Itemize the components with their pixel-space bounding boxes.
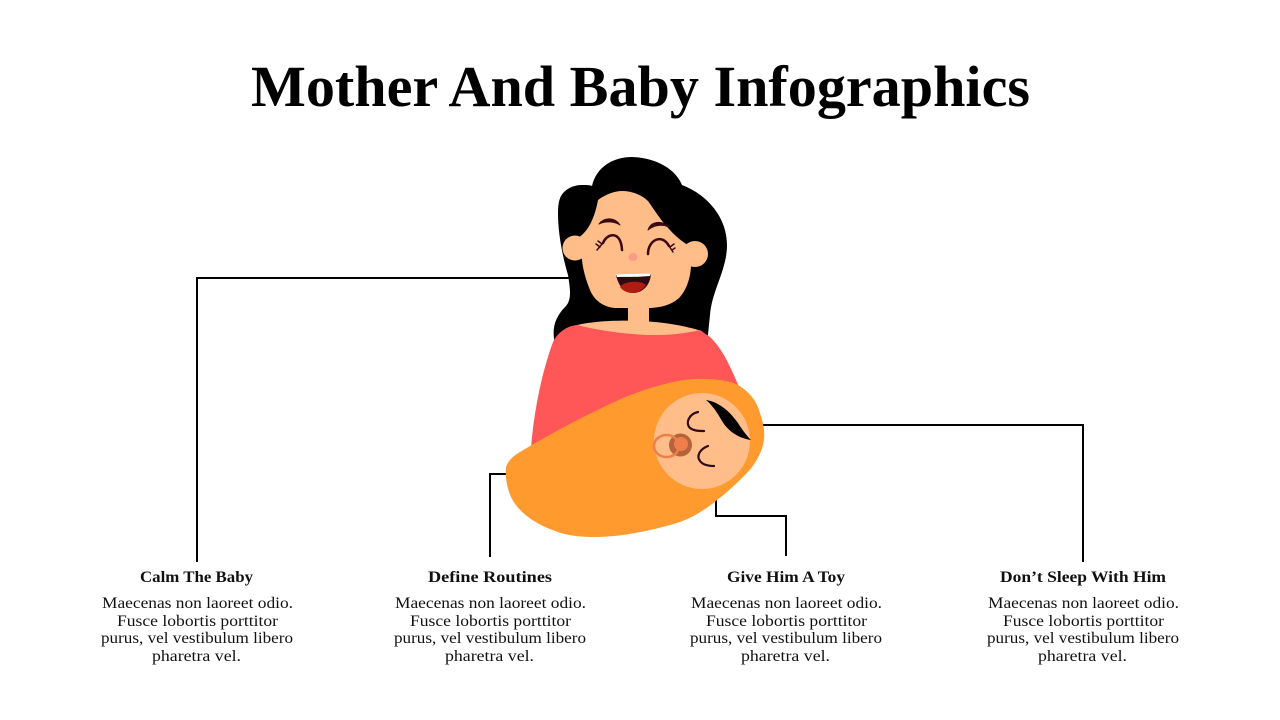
illustration: mother and baby	[506, 157, 764, 537]
mother hair	[554, 157, 727, 344]
body: purus, vel vestibulum libero	[101, 630, 293, 647]
body: purus, vel vestibulum libero	[987, 630, 1179, 647]
mother face	[578, 191, 695, 308]
mother ears	[562, 236, 708, 267]
body: Fusce lobortis porttitor	[410, 613, 572, 630]
mother nose	[628, 253, 638, 261]
heading: Don’t Sleep With Him	[1000, 569, 1167, 586]
body	[394, 595, 586, 665]
body	[690, 595, 882, 665]
mother chest	[574, 321, 702, 338]
body: Maecenas non laoreet odio.	[102, 595, 293, 612]
text block: calm the baby	[101, 569, 293, 665]
body	[987, 595, 1179, 665]
text block: give him a toy	[690, 569, 882, 665]
body: pharetra vel.	[741, 648, 830, 665]
connector: don't sleep with him	[760, 425, 1083, 562]
body: Maecenas non laoreet odio.	[988, 595, 1179, 612]
body: Maecenas non laoreet odio.	[691, 595, 882, 612]
body: pharetra vel.	[1038, 648, 1127, 665]
body	[101, 595, 293, 665]
mother mouth	[616, 274, 651, 293]
body: purus, vel vestibulum libero	[690, 630, 882, 647]
body: pharetra vel.	[152, 648, 241, 665]
connector: calm the baby	[197, 278, 569, 562]
body: pharetra vel.	[445, 648, 534, 665]
connector: define routines	[490, 474, 510, 557]
mother eyes	[596, 235, 675, 254]
baby blanket	[506, 379, 764, 537]
baby hair	[706, 400, 751, 440]
title: Mother And Baby Infographics	[251, 54, 1030, 119]
body: Maecenas non laoreet odio.	[395, 595, 586, 612]
body: Fusce lobortis porttitor	[1003, 613, 1165, 630]
heading: Calm The Baby	[140, 569, 253, 586]
baby pacifier	[654, 434, 692, 457]
connector: give him a toy	[716, 495, 786, 556]
baby face	[654, 393, 750, 489]
text block: define routines	[394, 569, 586, 665]
body: Fusce lobortis porttitor	[117, 613, 279, 630]
baby eyes	[688, 412, 714, 466]
body: purus, vel vestibulum libero	[394, 630, 586, 647]
text block: don't sleep with him	[987, 569, 1179, 665]
mother neck	[628, 300, 649, 324]
mother eyebrows	[599, 219, 669, 230]
body: Fusce lobortis porttitor	[706, 613, 868, 630]
heading: Give Him A Toy	[727, 569, 845, 586]
mother shirt	[531, 325, 741, 470]
heading: Define Routines	[428, 569, 552, 586]
